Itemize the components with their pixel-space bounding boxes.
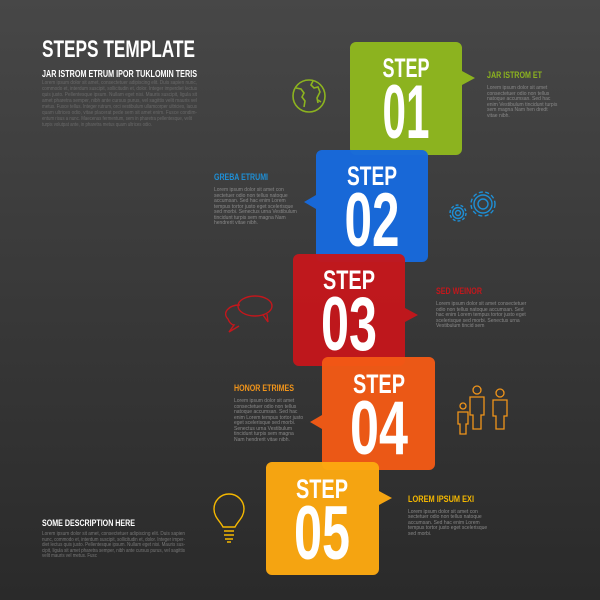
text: step 01: enim Vestibulum tincidunt turpis xyxy=(487,102,558,108)
text: step 05: accumsan. Sed hac enim Lorem xyxy=(408,520,480,526)
step 04 box: STEP xyxy=(353,369,405,399)
intro text: quis justo. Pellentesque ipsum. Nullam eget nisi. Mauris suscipit, ligula sit xyxy=(42,92,198,98)
icon: speech bubbles xyxy=(226,296,272,332)
title xyxy=(42,36,197,80)
step 02 box xyxy=(304,150,428,263)
intro text: turpis volutpat ante, in pharetra metus quam ultrices odio. xyxy=(42,122,152,128)
text: step 01: consectetuer odio non tellus xyxy=(487,91,550,97)
step 05 box: 05 xyxy=(294,491,350,576)
step 03 box: STEP xyxy=(323,265,375,295)
text: step 05 xyxy=(408,494,487,537)
text: step 05: Lorem ipsum dolor sit amet con xyxy=(408,509,478,515)
step 02 box: STEP xyxy=(347,161,397,191)
text: step 03: scelerisque sed morbi. Senectus urna xyxy=(436,318,520,324)
text: step 04: enim Lorem tempus tortor justo xyxy=(234,415,303,421)
step 03 box xyxy=(293,254,418,367)
text: step 05: sectetuer odio non tellus natoque xyxy=(408,514,482,520)
bottom description xyxy=(42,518,185,559)
intro text: entum risus a nunc. Maecenas fermentum, sem in pharetra pellentesque, velit xyxy=(42,116,193,122)
text: step 05: tempus tortor justo eget scelerisque xyxy=(408,525,487,531)
intro text: Lorem ipsum dolor sit amet, consectetuer adipiscing elit. Duis sapien nunc, xyxy=(42,80,197,86)
text: step 01 xyxy=(487,70,558,119)
text: step 02 xyxy=(214,172,297,226)
icon: people xyxy=(458,386,507,434)
bottom description: cipit, ligula sit amet pharetra semper, nibh ante cursus purus, vel sagittis xyxy=(42,548,185,554)
step 05 box xyxy=(266,462,392,576)
step 05 box: STEP xyxy=(296,474,348,504)
text: step 02: accumsan. Sed hac enim Lorem xyxy=(214,198,286,204)
text: step 05: sed morbi. xyxy=(408,531,431,537)
step 04 box: 04 xyxy=(350,386,408,471)
text: step 04: consectetuer odio non tellus xyxy=(234,404,297,410)
text: step 05: LOREM IPSUM EXI xyxy=(408,494,474,504)
text: step 04: Lorem ipsum dolor sit amet xyxy=(234,398,295,404)
text: step 03 xyxy=(436,286,527,329)
step 01 box xyxy=(350,42,475,155)
text: step 04: Senectus urna Vestibulum xyxy=(234,426,292,432)
text: step 02: sectetuer odio non tellus natoque xyxy=(214,193,288,199)
step 01 box: STEP xyxy=(382,53,430,83)
intro text: commodo et, interdum suscipit, sollicitudin et, dolor. Integer imperdiet lectus xyxy=(42,86,197,92)
icon: globe xyxy=(293,80,325,112)
text: step 01: Lorem ipsum dolor sit amet xyxy=(487,85,548,91)
text: step 01: natoque accumsan. Sed hac xyxy=(487,96,551,102)
title: JAR ISTROM ETRUM IPOR TUKLOMIN TERIS xyxy=(42,69,197,80)
text: step 03: hac enim Lorem tempus tortor justo eget xyxy=(436,312,526,318)
icon: light bulb xyxy=(214,494,244,542)
text: step 03: Lorem ipsum dolor sit amet consectetuer xyxy=(436,301,527,307)
bottom description: SOME DESCRIPTION HERE xyxy=(42,518,135,528)
intro text: quam ultrices odio, vitae placerat pede sem sit amet enim. Fusce condim- xyxy=(42,110,197,116)
text: step 04: Nam hendrerit vitae nibh. xyxy=(234,437,290,443)
text: step 01: JAR ISTROM ET xyxy=(487,70,542,80)
bottom description: Lorem ipsum dolor sit amet, consectetuer adipiscing elit. Duis sapien xyxy=(42,531,185,537)
text: step 03: SED WEINOR xyxy=(436,286,482,296)
text: step 03: Vestibulum tincid sem xyxy=(436,323,484,329)
text: step 04: eget scelerisque sed morbi. xyxy=(234,420,295,426)
text: step 02: tempus tortor justo eget scelerisque xyxy=(214,204,293,210)
step 01 box: 01 xyxy=(382,70,430,155)
text: step 03: odio non tellus natoque accumsan. Sed xyxy=(436,307,524,313)
bottom description: diet lectus quis justo. Pellentesque ipsum. Nullam eget nisi. Mauris sus- xyxy=(42,542,185,548)
text: step 02: hendrerit vitae nibh. xyxy=(214,220,258,226)
text: step 01: vitae nibh. xyxy=(487,113,510,119)
text: step 02: sed morbi. Senectus urna Vestibulum xyxy=(214,209,297,215)
text: step 02: GREBA ETRUMI xyxy=(214,172,268,182)
title: STEPS TEMPLATE xyxy=(42,36,195,63)
bottom description: velit mauris vel metus. Fusc xyxy=(42,553,97,559)
text: step 04: HONOR ETRIMES xyxy=(234,383,294,393)
step 02 box: 02 xyxy=(344,178,400,263)
text: step 02: Lorem ipsum dolor sit amet con xyxy=(214,187,284,193)
step 03 box: 03 xyxy=(321,282,377,367)
intro text: amet pharetra semper, nibh ante cursus purus, vel sagittis velit mauris vel xyxy=(42,98,197,104)
step 04 box xyxy=(310,357,435,471)
intro text xyxy=(42,80,198,128)
text: step 02: tincidunt turpis sem magna Nam xyxy=(214,215,286,221)
icon: gears xyxy=(450,192,495,221)
intro text: metus. Fusce tellus. Integer rutrum, orci vestibulum ullamcorper ultricies, lacus xyxy=(42,104,197,110)
text: step 04 xyxy=(234,383,303,443)
text: step 04: tincidunt turpis sem magna xyxy=(234,431,294,437)
bottom description: nunc, commodo et, interdum suscipit, sollicitudin et, dolor. Integer imper- xyxy=(42,537,185,543)
text: step 04: natoque accumsan. Sed hac xyxy=(234,409,298,415)
text: step 01: sem magna Nam hen dredt xyxy=(487,107,548,113)
